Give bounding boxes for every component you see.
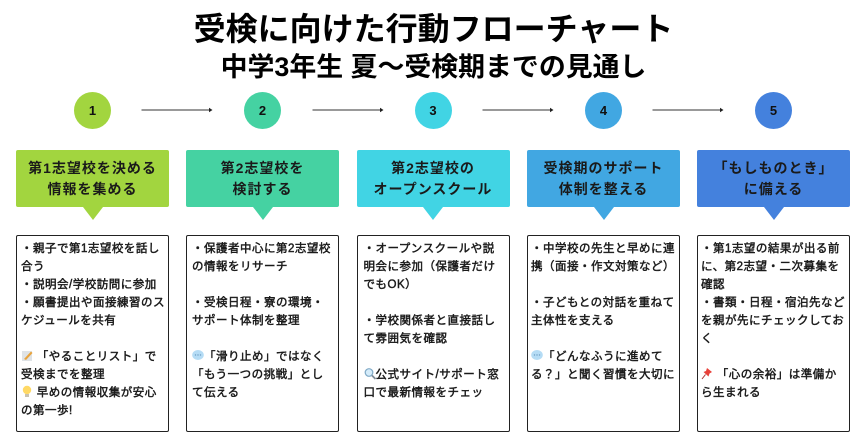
header callout 3 xyxy=(357,150,510,220)
panel: step 2 details: 「もう一つの挑戦」とし xyxy=(192,369,324,381)
panel: step 2 details: の情報をリサーチ xyxy=(192,261,288,273)
panel: step 5 details: に、第2志望・二次募集を xyxy=(701,261,840,273)
step circle 3: 3 xyxy=(429,103,437,118)
panel: step 2 details: サポート体制を整理 xyxy=(192,315,300,327)
header callout 1: 第1志望校を決める xyxy=(28,160,157,176)
panel: step 2 details: て伝える xyxy=(192,387,240,399)
header callout 2: 検討する xyxy=(232,180,292,196)
panel: step 1 details: ・説明会/学校訪問に参加 xyxy=(21,279,157,291)
panel: step 4 details: 主体性を支える xyxy=(531,315,615,327)
header callout 4 xyxy=(527,150,680,220)
panel: step 4 details xyxy=(527,235,680,432)
subtitle: 中学3年生 夏〜受検期までの見通し xyxy=(221,52,646,82)
panel: step 5 details: を親が先にチェックしてお xyxy=(701,315,844,327)
panel: step 2 details: 「滑り止め」ではなく xyxy=(204,351,324,363)
arrow 2 to 3 xyxy=(312,108,384,112)
panel: step 1 details: 受検までを整理 xyxy=(21,369,105,381)
panel: step 1 details xyxy=(16,235,169,432)
step circle 2: 2 xyxy=(259,103,266,118)
step circle 5 xyxy=(755,92,792,129)
panel: step 5 details: ら生まれる xyxy=(701,387,761,399)
panel: step 5 details: ・第1志望の結果が出る前 xyxy=(701,243,840,255)
panel: step 2 details xyxy=(186,235,339,432)
panel: step 5 details: 「心の余裕」は準備か xyxy=(717,369,837,381)
panel: step 3 details: ・学校関係者と直接話し xyxy=(364,315,496,327)
panel: step 3 details xyxy=(356,235,510,432)
panel: step 4 details: ・中学校の先生と早めに連 xyxy=(531,243,675,255)
header callout 1: 情報を集める xyxy=(48,180,138,196)
panel: step 4 details: ・子どもとの対話を重ねて xyxy=(531,297,675,309)
header callout 4: 受検期のサポート xyxy=(544,160,664,176)
panel: step 3 details: 明会に参加（保護者だけ xyxy=(364,261,496,273)
panel: step 1 details: 早めの情報収集が安心 xyxy=(37,387,157,399)
panel: step 1 details: の第一歩! xyxy=(21,405,73,417)
panel: step 3 details: ・オープンスクールや説 xyxy=(364,243,495,255)
panel: step 1 details: 合う xyxy=(21,261,45,273)
header callout 5: に備える xyxy=(744,180,803,196)
panel: step 3 details: でもOK） xyxy=(364,279,417,291)
arrow 3 to 4 xyxy=(482,108,554,112)
panel: step 1 details: ケジュールを共有 xyxy=(21,315,116,327)
panel: step 5 details: く xyxy=(701,333,713,345)
header callout 1 xyxy=(16,150,169,220)
panel: step 4 details: 携（面接・作文対策など） xyxy=(531,261,675,273)
panel: step 1 details: ・親子で第1志望校を話し xyxy=(21,243,160,255)
header callout 4: 体制を整える xyxy=(559,180,648,196)
panel: step 1 details: 「やることリスト」で xyxy=(37,351,157,363)
header callout 2 xyxy=(186,150,339,220)
header callout 5 xyxy=(697,150,850,220)
panel: step 2 details: ・受検日程・寮の環境・ xyxy=(192,297,324,309)
title: 受検に向けた行動フローチャート xyxy=(194,11,673,47)
step circle 2 xyxy=(244,92,281,129)
header callout 3: オープンスクール xyxy=(374,180,492,196)
step circle 3 xyxy=(414,92,452,129)
step circle 4: 4 xyxy=(600,103,607,118)
panel: step 4 details: る？」と聞く習慣を大切に xyxy=(531,369,675,381)
header callout 3: 第2志望校の xyxy=(391,160,475,176)
step circle 1: 1 xyxy=(89,103,96,118)
step circle 5: 5 xyxy=(770,103,777,118)
panel: step 5 details: 確認 xyxy=(701,279,725,291)
panel: step 3 details: 公式サイト/サポート窓 xyxy=(376,369,499,381)
panel: step 4 details: 「どんなふうに進めて xyxy=(543,351,663,363)
panel: step 3 details: 口で最新情報をチェッ xyxy=(364,387,484,399)
panel: step 5 details xyxy=(697,235,850,432)
step circle 1 xyxy=(74,92,111,129)
step circle 4 xyxy=(585,92,622,129)
panel: step 3 details: て雰囲気を確認 xyxy=(364,333,448,345)
panel: step 5 details: ・書類・日程・宿泊先など xyxy=(701,297,845,309)
header callout 5: 「もしものとき」 xyxy=(714,160,834,176)
arrow 1 to 2 xyxy=(142,108,212,112)
panel: step 2 details: ・保護者中心に第2志望校 xyxy=(192,243,331,255)
panel: step 1 details: ・願書提出や面接練習のス xyxy=(21,297,165,309)
arrow 4 to 5 xyxy=(652,108,724,112)
header callout 2: 第2志望校を xyxy=(221,160,304,176)
